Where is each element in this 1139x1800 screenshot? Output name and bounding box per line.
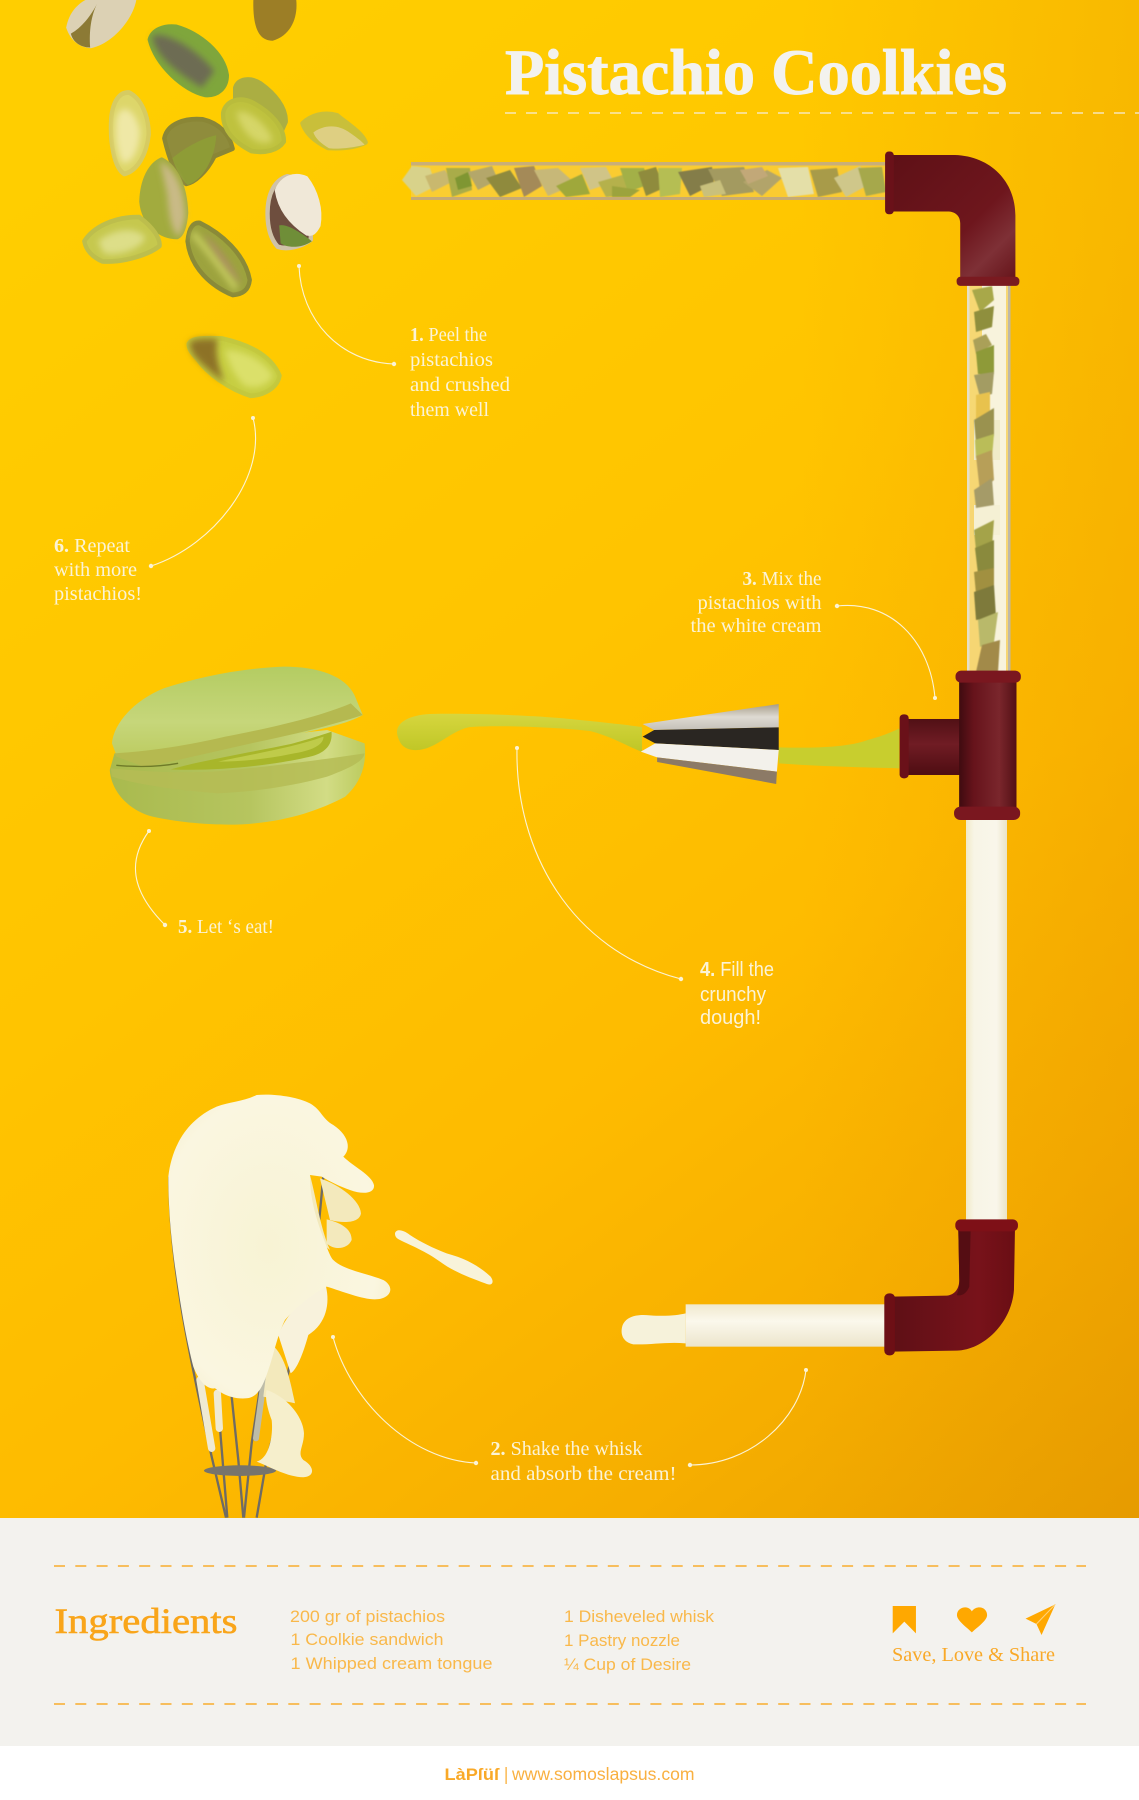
- step 3 callout: pistachios with: [698, 592, 822, 614]
- step 1 callout: [297, 264, 510, 421]
- step 5 callout: [135, 829, 274, 938]
- pistachio: white shell: [268, 176, 319, 248]
- flying cream splash: [395, 1230, 493, 1285]
- macaron bottom shell: [110, 730, 365, 825]
- ingredient list column 2: ¼ Cup of Desire: [564, 1655, 691, 1674]
- maroon elbow fitting, bottom right: [884, 1219, 1018, 1355]
- step 3 callout: [690, 568, 937, 700]
- icon: bookmark: [893, 1606, 916, 1633]
- icon: heart: [957, 1607, 987, 1632]
- ingredient list column 2: 1 Pastry nozzle: [564, 1631, 680, 1650]
- step 4 callout: [515, 746, 774, 1029]
- step 4 callout: dough!: [700, 1007, 761, 1029]
- whisk wires: [169, 1177, 323, 1518]
- macaron: [110, 667, 365, 825]
- glass tube with pistachios and cream, vertical: [967, 285, 1010, 673]
- ingredient list column 1: 200 gr of pistachios: [290, 1607, 445, 1626]
- step 6 callout: 6. Repeat: [54, 535, 130, 557]
- icon: paper plane: [1026, 1604, 1055, 1635]
- step 1 callout: 1. Peel the: [410, 324, 487, 346]
- whipped cream whisk: [168, 1095, 493, 1518]
- piping nozzle: [641, 704, 899, 784]
- ingredient list column 2: [564, 1607, 715, 1674]
- step 4 callout: 4. Fill the: [700, 959, 774, 981]
- footer logo and website: LàPſüſ: [444, 1765, 500, 1784]
- maroon T fitting: [900, 671, 1021, 820]
- step 2 callout: [331, 1335, 808, 1485]
- pistachio: centre kernel: [223, 100, 284, 152]
- cream drips behind: [263, 1175, 361, 1403]
- maroon elbow fitting, top right: [885, 151, 1019, 286]
- steel cone: [641, 704, 779, 784]
- macaron top shell: [112, 667, 363, 767]
- ingredient list column 2: 1 Disheveled whisk: [564, 1607, 715, 1626]
- ingredients heading: Ingredients: [54, 1601, 238, 1641]
- pistachio: top brown: [253, 0, 297, 41]
- step 4 callout: crunchy: [700, 984, 766, 1006]
- white cream pipe, vertical: [966, 815, 1007, 1227]
- step 6 callout: with more: [54, 559, 137, 581]
- lower cream blob: [257, 1390, 312, 1477]
- macaron filling: [171, 732, 332, 770]
- step 1 callout: them well: [410, 399, 489, 421]
- macaron crumbly foot: [111, 753, 365, 793]
- white cream pipe with nozzle tip, horizontal: [622, 1304, 887, 1347]
- pistachio: back pair: [164, 80, 286, 185]
- falling pistachios: [66, 0, 366, 396]
- green cream string and drop: [397, 714, 642, 752]
- step 2 callout: and absorb the cream!: [490, 1463, 676, 1485]
- cream through nozzle to fitting: [779, 728, 899, 768]
- main cream mass: [168, 1095, 390, 1398]
- pistachio: open shell top: [66, 0, 136, 48]
- ingredient list column 1: 1 Whipped cream tongue: [290, 1654, 492, 1673]
- step 5 callout: 5. Let ‘s eat!: [178, 916, 274, 938]
- pistachio: single falling: [189, 338, 280, 396]
- icons: [893, 1604, 1055, 1635]
- footer logo and website: www.somoslapsus.com: [511, 1764, 694, 1784]
- step 1 callout: and crushed: [410, 374, 510, 396]
- pistachio: halved right: [302, 114, 366, 149]
- ingredients panel: [0, 1518, 1139, 1746]
- step 3 callout: the white cream: [690, 615, 822, 637]
- ingredient list column 1: 1 Coolkie sandwich: [290, 1630, 444, 1649]
- pistachio: large green kernel: [150, 27, 227, 95]
- title: Pistachio Coolkies: [505, 37, 1007, 109]
- ingredient list column 1: [290, 1607, 492, 1673]
- step 1 callout: pistachios: [410, 349, 493, 371]
- step 6 callout: pistachios!: [54, 583, 142, 605]
- share caption: Save, Love & Share: [892, 1644, 1055, 1666]
- step 3 callout: 3. Mix the: [742, 568, 822, 590]
- pistachio: pale left: [111, 92, 149, 174]
- cream coating on wires: [200, 1380, 219, 1448]
- whisk ring: [204, 1465, 276, 1476]
- pistachio: green upright: [141, 160, 186, 237]
- step 6 callout: [54, 416, 256, 605]
- glass tube with crushed pistachios, horizontal: [402, 162, 887, 200]
- pistachio: lower centre: [188, 223, 250, 295]
- pistachio: lower left: [84, 217, 160, 261]
- step 2 callout: 2. Shake the whisk: [490, 1438, 642, 1460]
